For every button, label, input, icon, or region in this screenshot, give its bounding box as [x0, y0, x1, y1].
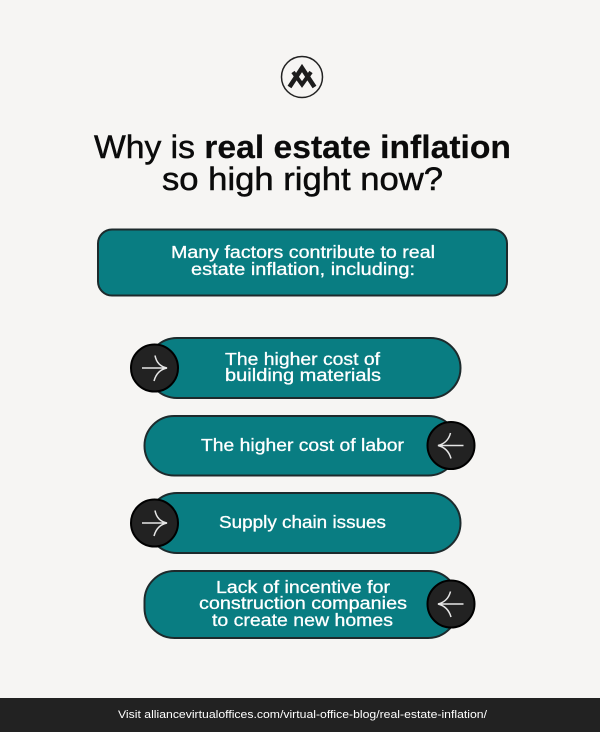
icon: logo — [282, 56, 322, 98]
panel: building materials — [131, 338, 460, 398]
panel: supply chain — [131, 493, 460, 553]
intro text: Many factors contribute to real — [171, 242, 435, 262]
label: building materials — [225, 365, 381, 385]
title: so high right now? — [162, 161, 443, 197]
icon: left arrow — [428, 422, 474, 469]
label: Supply chain issues — [219, 512, 386, 532]
panel: lack of incentive — [144, 571, 474, 638]
label — [225, 349, 381, 385]
panel: intro — [98, 230, 507, 296]
label: to create new homes — [212, 610, 393, 630]
intro text — [171, 242, 435, 279]
label: construction companies — [199, 593, 407, 613]
title — [94, 129, 511, 197]
footer text: Visit alliancevirtualoffices.com/virtual-office-blog/real-estate-inflation/ — [118, 709, 488, 721]
label: The higher cost of — [225, 349, 380, 369]
label — [199, 577, 407, 630]
panel: labor — [144, 416, 474, 476]
intro text: estate inflation, including: — [191, 259, 415, 279]
label: Lack of incentive for — [216, 577, 390, 597]
icon: right arrow — [131, 344, 178, 392]
title: Why is real estate inflation — [94, 129, 511, 165]
icon: left arrow — [428, 580, 474, 628]
icon: right arrow — [131, 500, 178, 546]
footer — [0, 698, 600, 732]
label: The higher cost of labor — [201, 435, 404, 455]
